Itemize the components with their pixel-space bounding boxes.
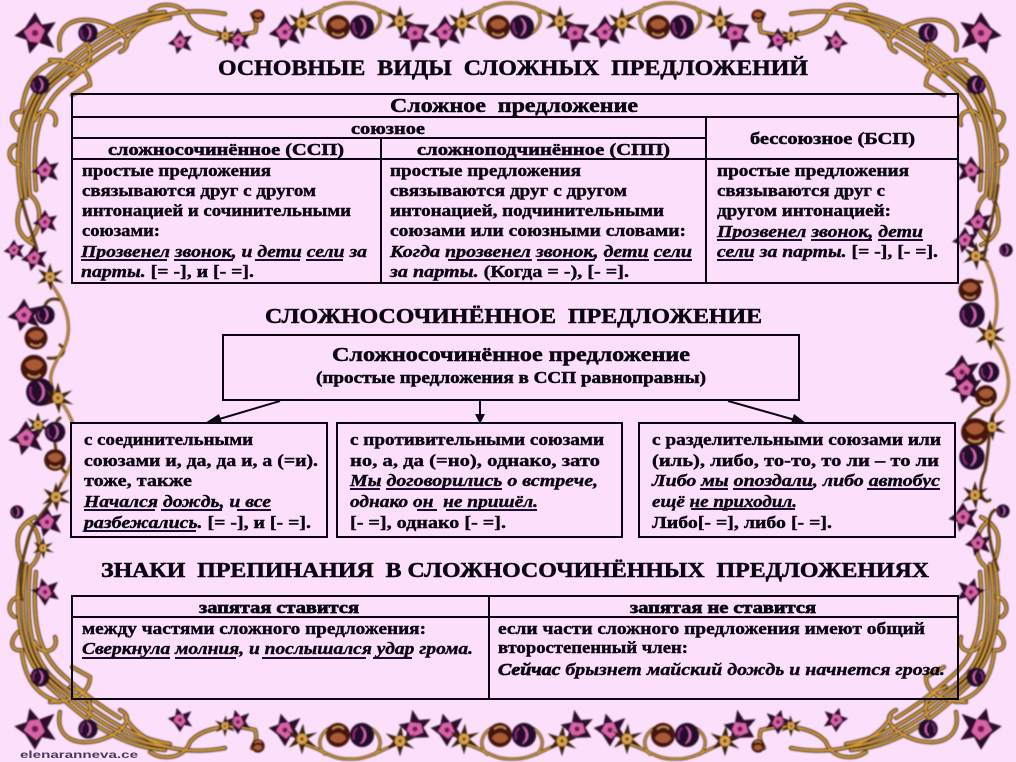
column text: БСП [716, 161, 938, 261]
box: adversative conjunctions: с противительными союзами [350, 430, 605, 449]
column text: БСП: Прозвенел звонок, дети [716, 222, 923, 241]
box: copulative conjunctions: Начался дождь, и все [83, 492, 271, 511]
table frame and grid [72, 94, 958, 283]
arrow: to middle box [475, 401, 485, 424]
column text: СПП [389, 161, 692, 281]
left cell text [82, 619, 473, 658]
column text: БСП: другом интонацией: [717, 201, 891, 220]
corner vine: bottom right [751, 517, 1006, 757]
box: disjunctive conjunctions: Либо мы опоздали, либо автобус [651, 471, 941, 490]
definition box [223, 335, 799, 400]
box: disjunctive conjunctions [639, 423, 955, 537]
table heading: Сложное предложение [390, 95, 638, 117]
column heading: comma used: запятая ставится [199, 598, 359, 617]
table: comma rules [72, 596, 958, 699]
definition box: Сложносочинённое предложение [332, 344, 690, 366]
right cell text: второстепенный член: [498, 638, 688, 657]
section heading: compound sentence: СЛОЖНОСОЧИНЁННОЕ ПРЕДЛОЖЕНИЕ [265, 304, 762, 328]
right cell text: если части сложного предложения имеют общий [498, 619, 926, 638]
right side vine [945, 185, 1013, 570]
column text: ССП [80, 161, 367, 281]
arrow: to right box [728, 401, 806, 423]
column text: БСП: связываются друг с [717, 181, 885, 200]
column heading: союзное: союзное [351, 119, 425, 138]
column heading: ССП: сложносочинённое (ССП) [108, 140, 344, 159]
column text: ССП: связываются друг с другом [82, 181, 316, 200]
table frame and grid [72, 596, 958, 699]
box: adversative conjunctions: но, а, да (=но), однако, зато [350, 451, 600, 470]
column text: БСП: сели за парты. [= -], [- =]. [717, 242, 938, 261]
column text: ССП: парты. [= -], и [- =]. [81, 262, 254, 281]
bottom flower chain [269, 707, 762, 759]
column text: ССП: Прозвенел звонок, и дети сели за [80, 242, 367, 261]
box: disjunctive conjunctions: Либо[- =], либо [- =]. [652, 513, 832, 532]
column heading: comma not used: запятая не ставится [630, 598, 816, 617]
arrow: to left box [205, 401, 280, 423]
box: disjunctive conjunctions: с разделительными союзами или [652, 430, 942, 449]
column text: СПП: Когда прозвенел звонок, дети сели [389, 242, 692, 261]
right cell text: Сейчас брызнет майский дождь и начнется гроза. [498, 660, 945, 679]
box: copulative conjunctions: союзами и, да, да и, а (=и). [84, 451, 318, 470]
box: copulative conjunctions: разбежались. [= -], и [- =]. [82, 513, 311, 532]
column heading: БСП: бессоюзное (БСП) [750, 129, 915, 148]
column text: СПП: союзами или союзными словами: [390, 221, 686, 240]
section heading: punctuation: ЗНАКИ ПРЕПИНАНИЯ В СЛОЖНОСОЧИНЁННЫХ ПРЕДЛОЖЕНИЯХ [101, 558, 929, 582]
column text: СПП: интонацией, подчинительными [390, 201, 665, 220]
corner vine: bottom left [10, 517, 265, 757]
corner vine: top right [751, 5, 1006, 245]
box: adversative conjunctions [337, 423, 622, 537]
column text: ССП: интонацией и сочинительными [82, 201, 352, 220]
right cell text [498, 619, 945, 679]
column text: СПП: простые предложения [390, 161, 581, 180]
column text: СПП: связываются друг с другом [390, 181, 627, 200]
box: copulative conjunctions [71, 423, 327, 537]
top flower chain [269, 3, 757, 55]
watermark: elenaranneva.ce [20, 750, 139, 761]
column heading: СПП: сложноподчинённое (СПП) [417, 140, 670, 159]
definition box: (простые предложения в ССП равноправны) [316, 368, 706, 387]
column text: ССП: союзами: [82, 221, 160, 240]
title: ОСНОВНЫЕ ВИДЫ СЛОЖНЫХ ПРЕДЛОЖЕНИЙ [218, 55, 808, 80]
box: adversative conjunctions: однако он не пришёл. [350, 492, 538, 511]
box: adversative conjunctions: [- =], однако [- =]. [350, 513, 506, 532]
box: disjunctive conjunctions: ещё не приходил. [652, 492, 797, 511]
left cell text: Сверкнула молния, и послышался удар грома. [82, 639, 473, 658]
column text: БСП: простые предложения [717, 161, 909, 180]
box: disjunctive conjunctions: (иль), либо, то-то, то ли – то ли [652, 451, 940, 470]
box: copulative conjunctions: с соединительными [84, 430, 254, 449]
box: copulative conjunctions: тоже, также [84, 471, 192, 490]
column text: СПП: за парты. (Когда = -), [- =]. [389, 262, 629, 281]
column text: ССП: простые предложения [82, 161, 271, 180]
left side vine [4, 200, 76, 600]
corner vine: top left [10, 5, 265, 245]
table: types of complex sentences [72, 94, 958, 283]
left cell text: между частями сложного предложения: [82, 619, 426, 638]
box: adversative conjunctions: Мы договорились о встрече, [349, 471, 598, 490]
